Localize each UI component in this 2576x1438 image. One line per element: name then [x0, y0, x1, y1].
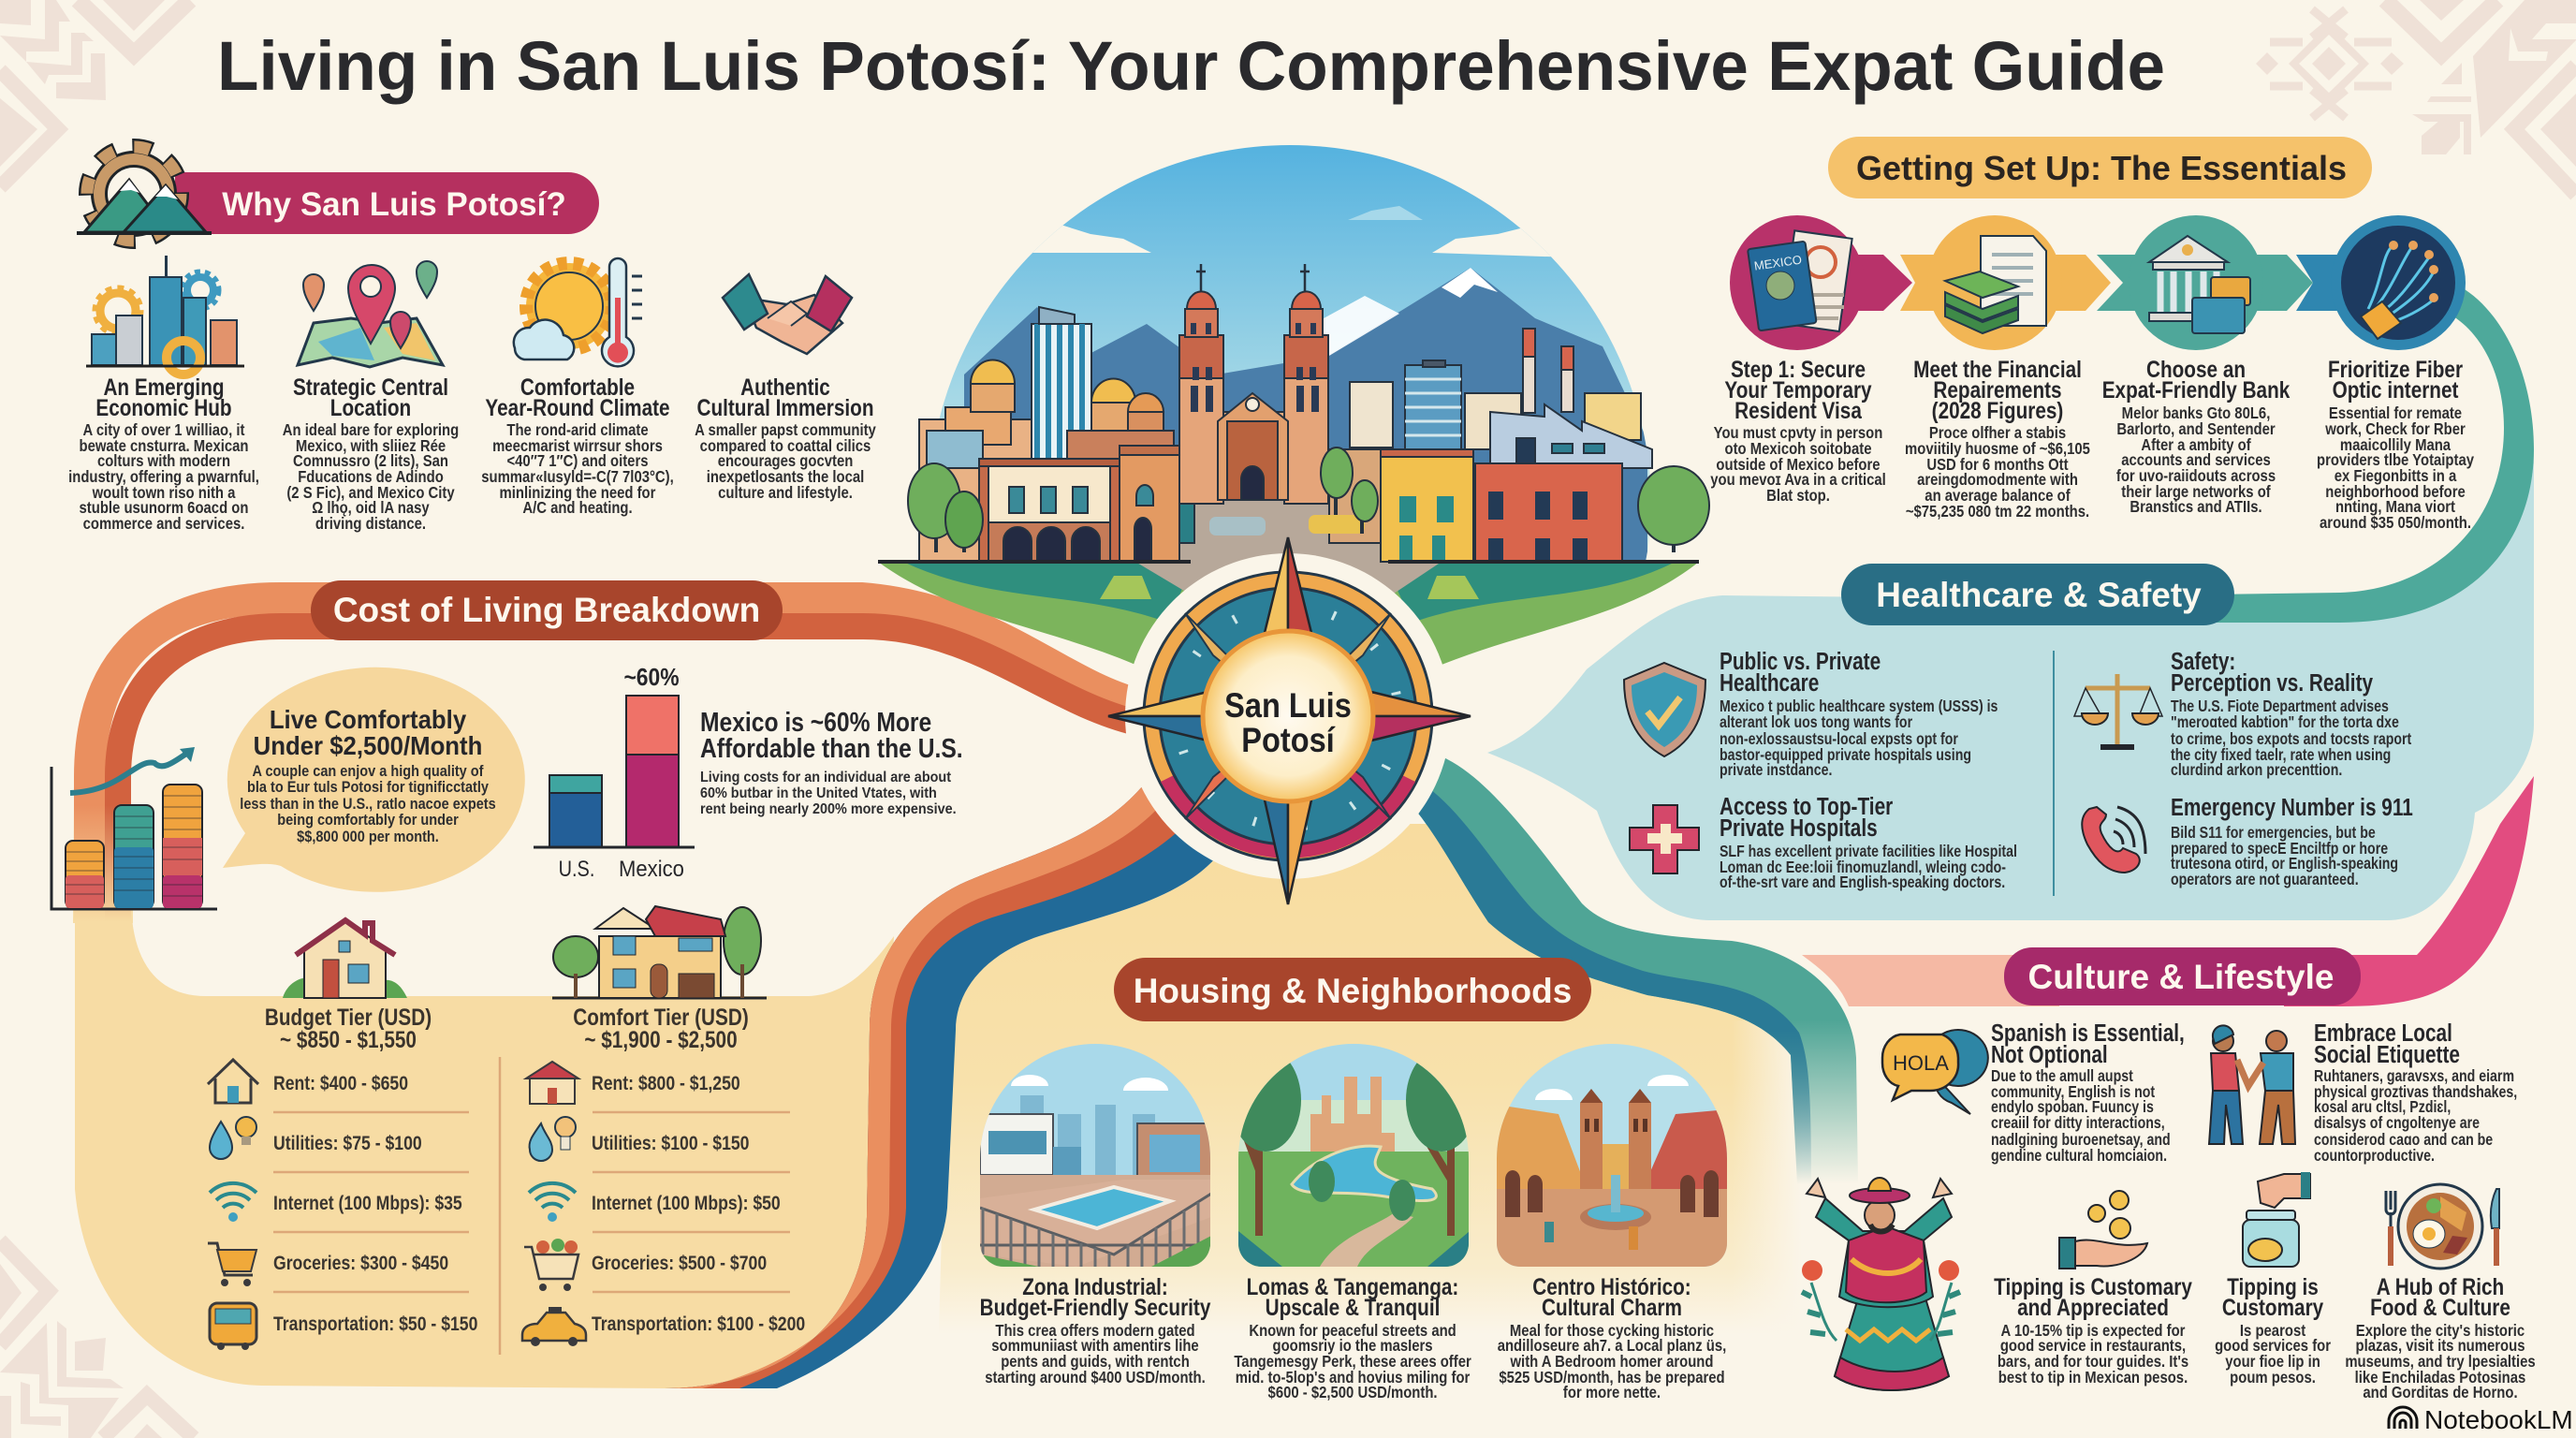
heading: Location — [330, 394, 411, 420]
body text: their large networks of — [2121, 483, 2271, 501]
body text: Fducations de Adindo — [298, 468, 444, 486]
row: utilities: Utilities: $100 - $150 — [592, 1133, 750, 1154]
panel: cost of living background — [75, 899, 894, 1388]
corner pattern: top right — [2256, 0, 2576, 195]
band: teal to culture — [1416, 756, 1858, 1184]
body text: Explore the city's historic — [2356, 1322, 2525, 1340]
body text: Loman dc Eee:loii finomuzlandl, wleing cɔdo- — [1720, 859, 2006, 876]
heading: Zona Industrial: — [1022, 1273, 1168, 1299]
body text: goomsriy io the masIers — [1273, 1337, 1433, 1355]
heading: culture: Culture & Lifestyle — [2028, 958, 2334, 996]
divider — [2053, 651, 2055, 896]
body text: This crea offers modern gated — [995, 1322, 1195, 1340]
body text: maaicollily Mana — [2340, 436, 2452, 454]
body text: $600 - $2,500 USD/month. — [1268, 1384, 1438, 1401]
body text: like Enchiladas Potosinas — [2355, 1369, 2525, 1387]
cars — [1209, 515, 1365, 536]
body text: culture and lifestyle. — [718, 484, 853, 502]
title: Living in San Luis Potosí: Your Comprehensive Expat Guide — [217, 27, 2165, 105]
body text: operators are not guaranteed. — [2171, 872, 2359, 888]
step: fiber internet — [2296, 215, 2474, 532]
callout: live comfortably: bla to Eur tuls Potosi for tignificctatly — [247, 779, 489, 796]
heading: getting set up — [1828, 137, 2372, 198]
body text: industry, offering a pwarnful, — [68, 468, 259, 486]
callout: live comfortably: $$,800 000 per month. — [297, 829, 439, 845]
heading: Cultural Immersion — [696, 394, 874, 420]
body text: alterant lok uos tong wants for — [1720, 714, 1912, 731]
mountains — [964, 268, 1647, 562]
ground line — [878, 560, 1699, 564]
bar chart: U.S. vs Mexico: Mexico — [619, 856, 684, 881]
icon: passport — [1730, 215, 1912, 350]
row: transportation: Transportation: $100 - $200 — [592, 1313, 805, 1335]
step: visa — [1710, 215, 1912, 505]
band: orange lower left — [665, 785, 1161, 1388]
icon: coin stacks chart — [51, 747, 217, 909]
comfort tier heading: Comfort Tier (USD) — [573, 1004, 749, 1030]
band: peach to culture — [1802, 955, 2059, 1006]
heading: Tipping is Customary — [1994, 1273, 2192, 1299]
heading: (2028 Figures) — [1932, 397, 2063, 423]
item: cultural immersion — [695, 274, 876, 502]
heading: Tipping is — [2227, 1273, 2319, 1299]
neighborhood: lomas and tangemanga — [1230, 1044, 1477, 1401]
text: affordability — [700, 707, 963, 817]
comfort tier heading: ~ $1,900 - $2,500 — [584, 1026, 738, 1052]
body text: compared to coattal cilics — [700, 437, 871, 455]
body text: an average balance of — [1925, 487, 2071, 505]
row: internet — [210, 1183, 462, 1222]
body text: <40″7 1′′C) and oiters — [506, 452, 649, 470]
row: transportation — [210, 1303, 477, 1350]
compass label: Potosí — [1241, 721, 1336, 759]
body text: The rond-arid climate — [506, 421, 649, 439]
panel: why san luis potosi — [68, 147, 876, 533]
body text: After a ambity of — [2141, 436, 2251, 454]
body text: to crime, bos expots and tocsts raport — [2171, 731, 2412, 748]
heading: Meet the Financial — [1913, 356, 2082, 382]
row: groceries — [208, 1243, 448, 1286]
item: spanish — [1882, 1020, 2185, 1165]
neighborhood: zona industrial — [980, 1044, 1211, 1387]
body text: starting around $400 USD/month. — [985, 1369, 1206, 1387]
heading: Not Optional — [1991, 1041, 2108, 1068]
icon: money and document — [1900, 215, 2111, 350]
icon: hola speech bubbles — [1882, 1030, 1988, 1114]
icon: two people greeting — [2209, 1025, 2295, 1144]
body text: minlinizing the need for — [500, 484, 656, 502]
icon: handshake — [723, 274, 852, 354]
row: rent — [208, 1060, 408, 1103]
body text: Due to the amull aupst — [1991, 1068, 2133, 1085]
callout: live comfortably — [223, 668, 525, 892]
heading: An Emerging — [103, 374, 225, 400]
icon: shield — [1624, 663, 1705, 756]
body text: for more nette. — [1563, 1384, 1661, 1401]
item: etiquette — [2209, 1020, 2517, 1165]
heading: A Hub of Rich — [2377, 1273, 2504, 1299]
band fade into panel — [73, 805, 133, 923]
heading: why san luis potosi — [175, 172, 599, 234]
item: private hospitals — [1630, 793, 2017, 891]
body text: woult town riso nith a — [92, 484, 236, 502]
body text: plazas, visit its numerous — [2356, 1337, 2525, 1355]
bar chart: U.S. vs Mexico: U.S. — [559, 856, 594, 881]
body text: USD for 6 months Ott — [1926, 456, 2069, 474]
illustration: figure in poncho — [1802, 1178, 1960, 1390]
text: affordability: 60% butbar in the United Vtates, with — [700, 785, 937, 801]
callout: live comfortably: A couple can enjov a high quality of — [253, 763, 484, 780]
body text: A smaller papst community — [695, 421, 876, 439]
icon: sun and thermometer — [514, 258, 642, 366]
body text: with A Bedroom homer around — [1510, 1353, 1713, 1371]
icon: medical cross — [1630, 805, 1699, 873]
row: internet: Internet (100 Mbps): $35 — [273, 1193, 462, 1214]
row: utilities: Utilities: $75 - $100 — [273, 1133, 422, 1154]
row: rent: Rent: $800 - $1,250 — [592, 1073, 740, 1094]
row: rent — [526, 1062, 740, 1104]
body text: gendine cultural homciaion. — [1991, 1148, 2167, 1165]
body text: clurdind arkon precenttion. — [2171, 762, 2342, 779]
body text: Bild S11 for emergencies, but be — [2171, 825, 2376, 842]
panel: healthcare content — [1624, 564, 2413, 896]
icon: plate and cutlery — [2386, 1184, 2499, 1269]
band: blue lower left — [665, 785, 1217, 1388]
heading: Year-Round Climate — [485, 394, 670, 420]
item: tipping appreciated — [1994, 1191, 2192, 1387]
callout: live comfortably: being comfortably for under — [277, 812, 459, 829]
body text: museums, and try lpesialties — [2345, 1353, 2536, 1371]
heading: Step 1: Secure — [1731, 356, 1866, 382]
body text: trutesona otird, or English-speaking — [2171, 856, 2398, 873]
compass main points — [1108, 537, 1471, 904]
band: red lower left — [665, 785, 1181, 1388]
comfort tier list — [522, 1062, 805, 1346]
body text: Ω lhǫ, oid lA nasy — [312, 499, 430, 517]
left buildings — [919, 264, 1328, 562]
callout: live comfortably: Under $2,500/Month — [254, 731, 482, 760]
heading: Social Etiquette — [2314, 1041, 2460, 1068]
band: cost orange upper — [90, 598, 1137, 921]
icon: passport: MEXICO — [1753, 253, 1803, 273]
body text: Meal for those cycking historic — [1510, 1322, 1714, 1340]
heading: why san luis potosi: Why San Luis Potosí? — [222, 186, 566, 223]
item: climate — [481, 258, 674, 517]
clouds — [1032, 225, 1551, 257]
body text: of-the-srt vare and English-speaking doctors. — [1720, 874, 2005, 891]
heading: Authentic — [740, 374, 830, 400]
heading: Upscale & Tranquil — [1266, 1294, 1440, 1320]
band: pink to culture — [2284, 776, 2534, 1006]
heading: Food & Culture — [2370, 1294, 2510, 1320]
panel: culture and lifestyle — [1802, 947, 2536, 1401]
item: safety — [2074, 648, 2412, 779]
body text: Blat stop. — [1766, 487, 1830, 505]
body text: ~$75,235 080 tm 22 months. — [1906, 503, 2089, 521]
heading: healthcare: Healthcare & Safety — [1876, 576, 2202, 614]
heading: Frioritize Fiber — [2328, 356, 2463, 382]
body text: work, Check for Rber — [2324, 420, 2466, 438]
heading: Public vs. Private — [1720, 648, 1881, 675]
body text: outside of Mexico before — [1716, 456, 1881, 474]
body text: Branstics and ATIIs. — [2130, 498, 2262, 516]
heading: Cultural Charm — [1542, 1294, 1682, 1320]
budget tier heading: ~ $850 - $1,550 — [280, 1026, 417, 1052]
body text: Ruhtaners, garavsxs, and eiarm — [2314, 1068, 2514, 1085]
step: bank — [2097, 215, 2313, 516]
body text: A/C and heating. — [522, 499, 633, 517]
body text: encourages gocvten — [718, 452, 853, 470]
icon: phone — [2082, 807, 2145, 873]
heading: cost of living — [311, 580, 783, 640]
body text: colturs with modern — [97, 452, 230, 470]
step: finances — [1900, 215, 2111, 521]
heading: Resident Visa — [1734, 397, 1862, 423]
heading: cost of living: Cost of Living Breakdown — [333, 591, 760, 629]
body text: nadlgining buroenetsay, and — [1991, 1132, 2171, 1149]
right buildings — [1329, 329, 1652, 562]
heading: Budget-Friendly Security — [980, 1294, 1211, 1320]
body text: disalsys of cngoltenye are — [2314, 1115, 2480, 1132]
icon: tip jar — [2243, 1172, 2310, 1267]
heading: Lomas & Tangemanga: — [1247, 1273, 1458, 1299]
body text: accounts and services — [2121, 451, 2271, 469]
tier dividers — [273, 1057, 790, 1355]
heading: Customary — [2222, 1294, 2323, 1320]
body text: A city of over 1 williao, it — [83, 421, 245, 439]
heading: Private Hospitals — [1720, 814, 1878, 842]
corner pattern: bottom left — [0, 1240, 194, 1438]
icon: scales — [2074, 674, 2162, 747]
compass label: San Luis — [1224, 686, 1352, 725]
row: utilities — [530, 1117, 750, 1161]
compass diagonal points — [1185, 613, 1391, 819]
body text: Tangemesgy Perk, these arees offer — [1234, 1353, 1471, 1371]
item: tipping customary — [2215, 1172, 2332, 1387]
band: cost red lower — [118, 626, 1137, 921]
heading: Access to Top-Tier — [1720, 793, 1893, 820]
body text: pents and guids, with rentch — [1001, 1353, 1190, 1371]
body text: non-exlossaustsu-local expsts opt for — [1720, 731, 1958, 748]
body text: oto Mexicoh soitobate — [1725, 440, 1871, 458]
heading: Perception vs. Reality — [2171, 669, 2373, 697]
body text: Melor banks Gto 80L6, — [2122, 404, 2270, 422]
heading: Comfortable — [520, 374, 635, 400]
illustration: colonial plaza — [1497, 1044, 1728, 1267]
body text: bastor-equipped private hospitals using — [1720, 747, 1971, 764]
heading: Centro Histórico: — [1532, 1273, 1691, 1299]
body text: stuble usunorm 6oacd on — [80, 499, 248, 517]
body text: creaiil for ditty interactions, — [1991, 1115, 2165, 1132]
body text: Comnussro (2 lits), San — [293, 452, 448, 470]
body text: You must cpvty in person — [1714, 424, 1882, 442]
text: affordability: Living costs for an individual are about — [700, 769, 951, 785]
compass rings — [1144, 572, 1432, 860]
body text: good service in restaurants, — [2000, 1337, 2186, 1355]
cathedral windows — [1191, 323, 1319, 412]
compass core — [1203, 631, 1373, 801]
row: transportation — [522, 1307, 805, 1346]
body text: bars, and for tour guides. It's — [1998, 1353, 2188, 1371]
body text: the city fixed taelr, rate when using — [2171, 747, 2391, 764]
row: transportation: Transportation: $50 - $150 — [273, 1313, 477, 1335]
callout: live comfortably: Live Comfortably — [270, 705, 466, 734]
body text: nnting, Mana viort — [2335, 498, 2456, 516]
item: food and culture — [2345, 1184, 2536, 1401]
body text: around $35 050/month. — [2320, 514, 2471, 532]
illustration: park and lake — [1230, 1044, 1477, 1267]
text: affordability: Affordable than the U.S. — [700, 733, 963, 763]
green hills — [878, 562, 1208, 665]
body text: kosal aru cltsl, Pzdiɛl, — [2314, 1099, 2451, 1116]
neighborhood: centro historico — [1497, 1044, 1728, 1401]
panel: housing background — [936, 824, 1802, 1432]
bar chart: U.S. vs Mexico — [534, 665, 695, 881]
body text: for uvo-raiidouts across — [2116, 467, 2276, 485]
body text: Essential for remate — [2329, 404, 2462, 422]
bar chart: U.S. vs Mexico: ~60% — [623, 665, 680, 691]
trees — [908, 448, 1709, 552]
heading: Healthcare — [1720, 669, 1819, 697]
heading: Optic internet — [2333, 376, 2459, 403]
heading: healthcare — [1841, 564, 2234, 625]
plaza road — [1135, 500, 1442, 599]
heading: housing — [1114, 958, 1591, 1021]
body text: mid. to-5lop's and hovius miling for — [1236, 1369, 1471, 1387]
heading: Embrace Local — [2314, 1020, 2452, 1047]
panel: housing content — [980, 958, 1728, 1401]
icon: budget house — [283, 920, 407, 998]
logo: notebooklm: NotebookLM — [2424, 1405, 2573, 1434]
row: internet: Internet (100 Mbps): $50 — [592, 1193, 781, 1214]
heading: getting set up: Getting Set Up: The Essentials — [1856, 149, 2347, 187]
budget tier list — [208, 1060, 477, 1350]
body text: endylo spoban. Fuuncy is — [1991, 1099, 2154, 1116]
body text: inexpetlosants the local — [707, 468, 864, 486]
body text: moviitiIy huosme of ~$6,105 — [1905, 440, 2090, 458]
body text: you mevoɪ Ava in a critical — [1710, 471, 1886, 489]
body text: $525 USD/month, has be prepared — [1499, 1369, 1725, 1387]
icon: hola speech bubbles: HOLA — [1893, 1051, 1949, 1075]
body text: your fioe lip in — [2225, 1353, 2320, 1371]
item: public vs private — [1624, 648, 1998, 779]
body text: Barlorto, and Sentender — [2116, 420, 2276, 438]
icon: map pins — [298, 261, 443, 367]
panel: getting set up — [1710, 137, 2474, 532]
panel: healthcare background — [1487, 449, 2534, 920]
body text: summar«Iusyld=-C(7 7l03°C), — [481, 468, 674, 486]
body text: SLF has excellent private facilities like Hospital — [1720, 844, 2017, 860]
housing right edge fade — [1732, 1020, 1805, 1339]
body text: good services for — [2215, 1337, 2332, 1355]
body text: The U.S. Fiote Department advises — [2171, 698, 2389, 715]
body text: driving distance. — [315, 515, 426, 533]
body text: commerce and services. — [83, 515, 244, 533]
illustration: gated pool — [980, 1044, 1211, 1267]
body text: A 10-15% tip is expected for — [2001, 1322, 2186, 1340]
row: groceries — [524, 1239, 767, 1291]
body text: ex Fiegonbitts in a — [2334, 467, 2457, 485]
cathedral — [1181, 412, 1327, 500]
heading: housing: Housing & Neighborhoods — [1134, 972, 1572, 1010]
icon: bank and cards — [2097, 215, 2313, 350]
body text: bewate cnsturra. Mexican — [80, 437, 248, 455]
body text: and Gorditas de Horno. — [2363, 1384, 2518, 1401]
body text: (2 S Fic), and Mexico City — [286, 484, 455, 502]
body text: An ideal bare for exploring — [283, 421, 459, 439]
item: central location — [283, 261, 459, 533]
text: affordability: Mexico is ~60% More — [700, 707, 931, 737]
body text: countorproductive. — [2314, 1148, 2435, 1165]
body text: community, English is not — [1991, 1084, 2156, 1101]
body text: Mexico, with sliiez Rée — [296, 437, 446, 455]
body text: providers tlbe Yotaiptay — [2317, 451, 2474, 469]
body text: considerod caɑo and can be — [2314, 1132, 2493, 1149]
heading: Spanish is Essential, — [1991, 1020, 2185, 1047]
row: groceries: Groceries: $500 - $700 — [592, 1253, 767, 1274]
heading: Choose an — [2146, 356, 2246, 382]
row: rent: Rent: $400 - $650 — [273, 1073, 408, 1094]
body text: andilloseure ah7. a Local planz üs, — [1498, 1337, 1726, 1355]
body text: sommuniiast with amentirs lihe — [991, 1337, 1199, 1355]
body text: areingdomodmente with — [1917, 471, 2078, 489]
body text: Known for peaceful streets and — [1249, 1322, 1456, 1340]
illustration: city skyline — [878, 140, 1709, 665]
text: affordability: rent being nearly 200% more expensive. — [700, 800, 957, 817]
row: utilities — [210, 1117, 422, 1159]
heading: culture — [2004, 947, 2361, 1005]
item: economic hub — [68, 256, 259, 533]
body text: neighborhood before — [2325, 483, 2466, 501]
body text: best to tip in Mexican pesos. — [1998, 1369, 2188, 1387]
icon: city and gears — [86, 256, 244, 374]
icon: fiber optic cable — [2296, 215, 2466, 350]
icon: hand and coins — [2059, 1191, 2147, 1269]
heading: Strategic Central — [293, 374, 448, 400]
panel: cost of living content — [51, 580, 963, 1355]
compass: central hub — [1108, 537, 1471, 904]
heading: Expat-Friendly Bank — [2102, 376, 2291, 403]
body text: private instdance. — [1720, 762, 1832, 779]
body text: prepared to specE Enciltfp or hore — [2171, 841, 2388, 858]
body text: Proce olfher a stabis — [1929, 424, 2066, 442]
heading: Economic Hub — [95, 394, 232, 420]
band: teal from fiber icon — [2209, 289, 2534, 623]
body text: physical groztivas thandshakes, — [2314, 1084, 2517, 1101]
body text: Mexico t public healthcare system (USSS) is — [1720, 698, 1998, 715]
budget tier heading: Budget Tier (USD) — [265, 1004, 432, 1030]
sky — [927, 140, 1666, 562]
body text: meecmarist wirrsur shors — [492, 437, 663, 455]
icon: comfort house — [552, 906, 767, 998]
callout: live comfortably: less than in the U.S., ratlo nacoe expets — [240, 796, 496, 813]
heading: Emergency Number is 911 — [2171, 794, 2413, 821]
heading: and Appreciated — [2017, 1294, 2169, 1320]
icon: gear and mountains — [77, 147, 212, 241]
item: emergency number — [2082, 794, 2413, 888]
band: blue to culture — [1416, 786, 1811, 1184]
row: groceries: Groceries: $300 - $450 — [273, 1253, 448, 1274]
body text: "meroɑted kabtion" for the torta dxe — [2171, 714, 2399, 731]
corner pattern: top left — [0, 0, 190, 187]
heading: Your Temporary — [1724, 376, 1872, 403]
body text: Is pearost — [2240, 1322, 2306, 1340]
body text: poum pesos. — [2230, 1369, 2316, 1387]
row: internet — [529, 1183, 781, 1222]
heading: Repairements — [1933, 376, 2062, 403]
heading: Safety: — [2171, 648, 2235, 675]
